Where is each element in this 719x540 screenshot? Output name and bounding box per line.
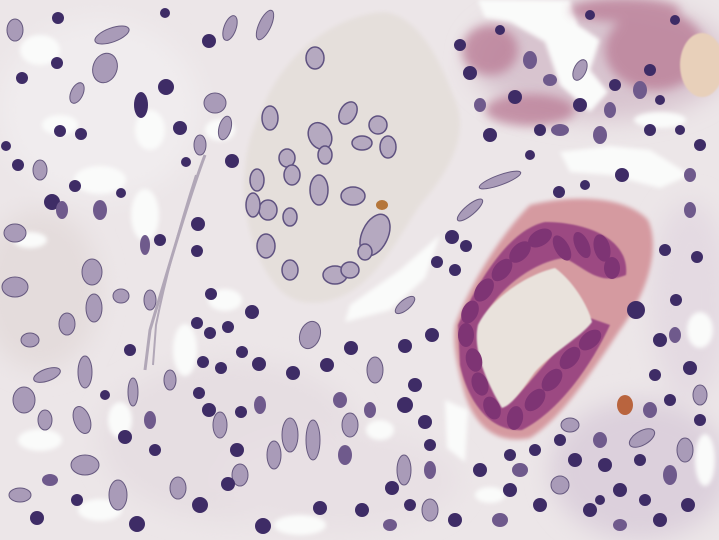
- duct: pink cytoplasm: [454, 199, 653, 439]
- giant cell body: [244, 12, 460, 303]
- duct nuclei: [458, 225, 620, 431]
- pink tissue, top right: [462, 0, 705, 126]
- duct lumen: [477, 268, 592, 408]
- fibre strand: [145, 155, 205, 370]
- brown pigment: [376, 200, 633, 415]
- giant cell nuclei: [246, 47, 396, 284]
- collagen whorl, top right: [680, 33, 719, 97]
- duct: purple epithelial ring: [458, 222, 626, 430]
